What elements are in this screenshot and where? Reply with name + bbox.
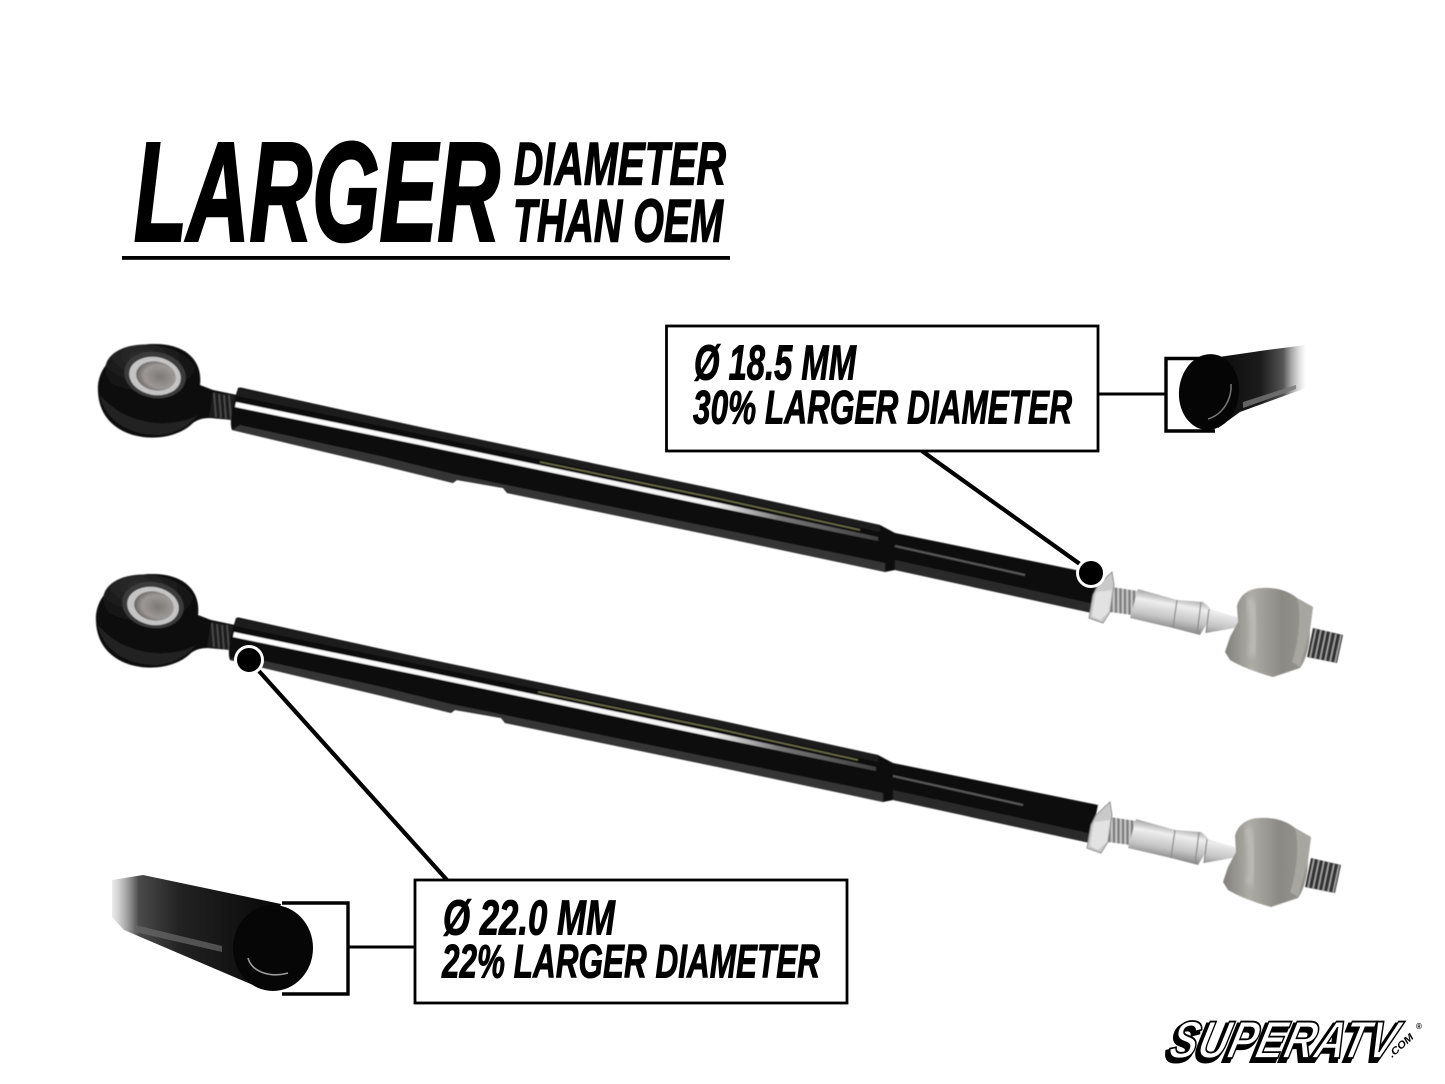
bracket <box>1166 358 1215 431</box>
callout text line 1: Ø 22.0 MM <box>443 892 616 946</box>
callout text line 2: 22% LARGER DIAMETER <box>441 934 820 988</box>
heading word: LARGER: LARGER <box>134 112 500 270</box>
logo: SuperATV.com <box>1161 1011 1422 1073</box>
marker dot on upper rod <box>1078 560 1104 586</box>
callout box <box>666 326 1098 451</box>
tube body fading right <box>1212 345 1306 428</box>
inset: tube end 22.0 mm <box>112 875 415 994</box>
callout: 22.0 mm <box>236 646 847 1003</box>
connector to callout box <box>1098 392 1165 396</box>
bracket <box>282 903 348 994</box>
connector to callout box <box>349 946 415 948</box>
callout text line 1: Ø 18.5 MM <box>694 336 857 390</box>
inset: tube end 18.5 mm <box>1098 345 1306 433</box>
heading underline <box>122 256 730 260</box>
tube end opening <box>233 905 313 991</box>
registered mark: ® <box>1416 1022 1422 1031</box>
title: larger diameter than OEM <box>122 112 730 270</box>
tube body fading left <box>112 875 281 988</box>
heading line: THAN OEM: THAN OEM <box>513 188 724 254</box>
leader line to lower rod <box>249 660 447 880</box>
leader line to upper rod <box>922 451 1091 572</box>
heading line: DIAMETER: DIAMETER <box>514 130 726 198</box>
callout text line 2: 30% LARGER DIAMETER <box>693 380 1072 434</box>
lower tie rod <box>96 569 1341 907</box>
callout box <box>415 880 847 1003</box>
tube end opening <box>1175 351 1243 433</box>
marker dot on lower rod <box>236 646 262 674</box>
callout: 18.5 mm <box>666 326 1104 586</box>
upper tie rod <box>98 339 1343 677</box>
logo .com: .COM <box>1387 1031 1417 1060</box>
